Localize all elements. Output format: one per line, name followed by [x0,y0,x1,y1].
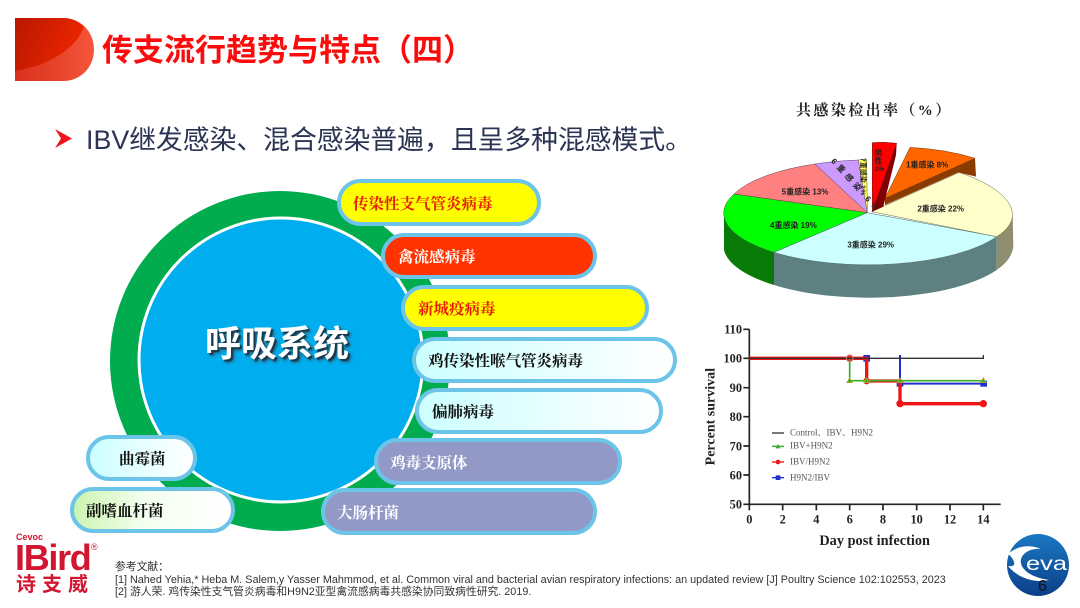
legend: H9N2/IBV [790,473,830,483]
pie chart: co-infection detection rate: 2% [875,166,884,173]
y axis tick labels: 50 [730,498,742,512]
pill: infectious laryngotracheitis virus [412,337,677,383]
y axis tick labels: 60 [730,468,742,482]
diagram: respiratory system circle [110,191,448,531]
pie chart: co-infection detection rate: 4重感染 19% [770,220,817,230]
pill: infectious bronchitis virus: 传染性支气管炎病毒 [353,196,493,212]
legend: Control、IBV、H9N2 [790,428,873,438]
pill: avian influenza virus: 禽流感病毒 [398,249,476,266]
x axis tick labels [746,513,989,527]
series: H9N2/IBV [749,355,987,387]
series: control [749,355,983,358]
title banner icon [15,18,94,81]
legend: IBV/H9N2 [790,457,830,467]
y axis tick labels [724,323,742,512]
logo chinese name: 诗支威 [16,574,94,596]
central label: 呼吸系统 [205,323,349,364]
x axis tick labels: 4 [813,513,819,527]
pill: Newcastle disease virus [401,285,649,331]
survival chart [704,323,1001,549]
bullet text: IBV继发感染、混合感染普遍，且呈多种混感模式。 [86,125,692,155]
pill: E. coli: 大肠杆菌 [337,504,399,522]
logo registered mark: ® [91,542,98,552]
pill: mycoplasma gallisepticum [374,438,622,485]
y axis tick labels: 70 [730,439,742,453]
y axis tick labels: 90 [730,381,742,395]
references [115,560,946,598]
pill: aspergillus [86,435,197,481]
pie chart: co-infection detection rate: 7重感染 1% [859,158,868,195]
y axis tick labels: 110 [724,323,742,337]
series: IBV+H9N2 [847,358,986,383]
references: [1] Nahed Yehia,* Heba M. Salem,y Yasser Mahmmod, et al. Common viral and bacterial avian respiratory infections: an updated review [J] Poultry Science 102:102553, 2023 [115,574,946,586]
series markers overlap at 100 [846,355,853,362]
x axis title: Day post infection [819,533,930,549]
pie chart: co-infection detection rate: 2重感染 22% [917,203,964,213]
pill: avian influenza virus [381,233,597,279]
pie chart: co-infection detection rate: 3重感染 29% [847,239,894,249]
x axis tick labels: 0 [746,513,752,527]
x axis tick labels: 6 [847,513,853,527]
references: 参考文献： [115,561,169,573]
logo small text: Cevoc [16,532,43,542]
pill: aspergillus: 曲霉菌 [119,451,166,468]
pill: infectious bronchitis virus [337,179,541,226]
logo wordmark: IBird [15,537,91,578]
pill: avibacterium paragallinarum: 副嗜血杆菌 [86,503,164,520]
y axis tick labels: 80 [730,410,742,424]
title: 传支流行趋势与特点（四） [102,33,474,68]
pill: metapneumovirus [415,388,663,434]
x axis tick labels: 14 [977,513,989,527]
axes [743,329,1001,510]
page number: 6 [1038,578,1047,595]
logo: Ceva: eva [1026,554,1068,575]
pie chart title: 共感染检出率（%） [796,103,953,119]
x axis tick labels: 8 [880,513,886,527]
pie chart: co-infection detection rate: 阴 [875,148,883,157]
logo: Ceva [1007,534,1069,596]
pie chart: co-infection detection rate: 1重感染 8% [906,159,948,169]
y axis title: Percent survival [704,368,719,465]
icon: bullet arrow [55,129,72,148]
pill: metapneumovirus: 偏肺病毒 [432,404,494,421]
pill: Newcastle disease virus: 新城疫病毒 [418,301,496,318]
pie chart: co-infection detection rate [724,142,1014,298]
pill: infectious laryngotracheitis virus: 鸡传染性喉气管炎病毒 [428,353,583,370]
pie chart: co-infection detection rate: 性 [875,155,883,165]
legend [772,428,873,483]
pill: E. coli [321,488,597,535]
pie chart: co-infection detection rate: 6重感染 6% [829,156,884,215]
series: IBV/H9N2 [749,355,987,407]
pie chart: co-infection detection rate: 5重感染 13% [782,187,828,197]
references: [2] 游人荣. 鸡传染性支气管炎病毒和H9N2亚型禽流感病毒共感染协同致病性研究. 2019. [115,586,531,598]
x axis tick labels: 12 [944,513,956,527]
x axis tick labels: 2 [780,513,786,527]
logo: IBird [15,532,98,596]
x axis tick labels: 10 [911,513,923,527]
pill: avibacterium paragallinarum [70,487,235,533]
pill: mycoplasma gallisepticum: 鸡毒支原体 [390,454,468,472]
legend: IBV+H9N2 [790,441,833,451]
y axis tick labels: 100 [724,352,742,366]
